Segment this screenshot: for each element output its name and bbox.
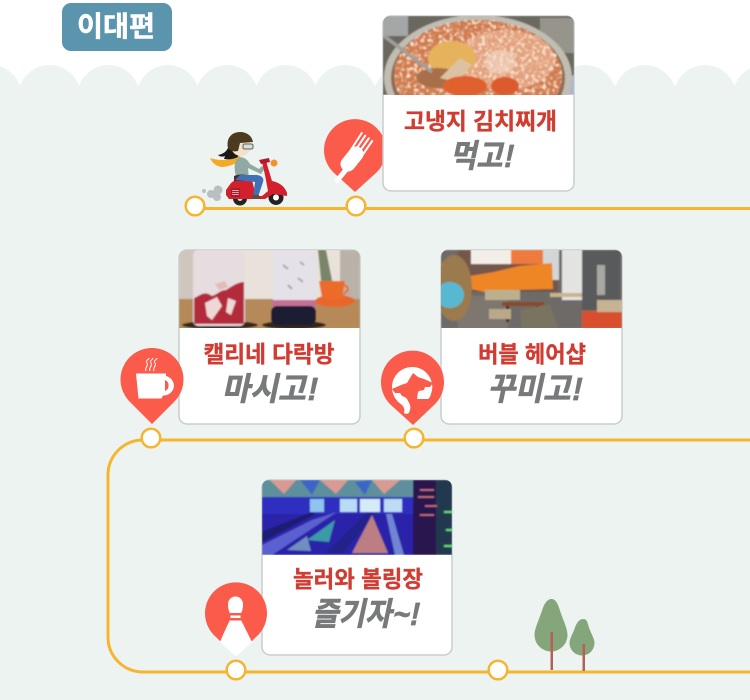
scooter body bbox=[226, 161, 287, 199]
helmet bbox=[228, 132, 253, 151]
pin: coffee cup bbox=[121, 348, 184, 424]
photo: milk drinks bbox=[179, 250, 360, 329]
pin: fork bbox=[324, 119, 386, 192]
icon: bowling pin bbox=[220, 597, 252, 657]
card: 놀러와 볼링장 bbox=[262, 480, 452, 655]
icon: fork bbox=[336, 133, 372, 182]
head bbox=[231, 136, 251, 156]
legs bbox=[235, 175, 263, 197]
hair bbox=[218, 148, 240, 159]
badge: 이대편 bbox=[62, 3, 172, 51]
subtitle: 먹고! bbox=[449, 138, 518, 174]
icon: steam bbox=[146, 358, 157, 371]
trees bbox=[534, 599, 594, 671]
title: 캘리네 다락방 bbox=[204, 341, 334, 367]
pin: bowling pin bbox=[205, 582, 267, 657]
route stop markers bbox=[142, 197, 507, 679]
title: 놀러와 볼링장 bbox=[293, 566, 423, 592]
tree: large bbox=[534, 599, 568, 670]
scarf bbox=[210, 156, 242, 167]
title: 버블 헤어샵 bbox=[478, 341, 586, 367]
icon: scooter rider bbox=[202, 132, 287, 206]
photo: kimchi stew bbox=[383, 16, 574, 95]
subtitle: 마시고! bbox=[221, 371, 322, 407]
exhaust smoke bbox=[202, 186, 222, 201]
icon: cup bbox=[136, 374, 174, 398]
card: 켈리네 다락방 bbox=[179, 250, 360, 424]
subtitle: 꾸미고! bbox=[486, 371, 587, 407]
torso bbox=[235, 157, 265, 180]
subtitle: 즐기자~! bbox=[311, 596, 424, 632]
icon: hair silhouette bbox=[392, 367, 432, 414]
pin: hair salon bbox=[381, 351, 444, 425]
card: 버블 헤어샵 bbox=[436, 250, 622, 424]
tree: small bbox=[570, 619, 594, 671]
photo: bowling alley bbox=[262, 480, 452, 555]
photo: hair shop lounge bbox=[436, 250, 622, 329]
handlebar bbox=[259, 158, 270, 164]
card: 고냉지 김치찌개 bbox=[383, 15, 574, 191]
badge: 이대편: 이대편 bbox=[77, 11, 155, 42]
route line bbox=[108, 208, 750, 672]
title: 고냉지 김치찌개 bbox=[404, 108, 557, 134]
wheels bbox=[233, 192, 247, 206]
